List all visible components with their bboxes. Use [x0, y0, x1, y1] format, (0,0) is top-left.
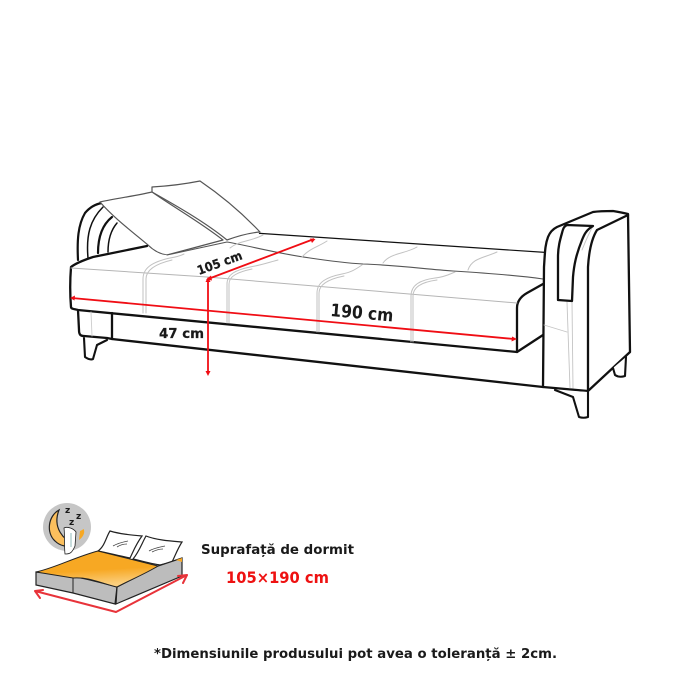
seat cushion: [70, 234, 545, 352]
arm strap: [558, 225, 593, 301]
back pillow: [152, 181, 260, 240]
icon: sleeping bed: [35, 503, 187, 612]
moon badge: z: [76, 512, 81, 522]
back rail: [260, 234, 545, 253]
right front leg: [555, 390, 588, 418]
front rail and base: [112, 313, 543, 387]
right armrest: [543, 211, 630, 391]
left leg: [84, 338, 107, 359]
pillows: [98, 531, 142, 558]
left armrest back: [78, 203, 117, 260]
right back leg: [613, 357, 626, 377]
sofa illustration: [70, 181, 630, 418]
value: sleeping surface size: 105×190 cm: [226, 568, 329, 587]
footnote: *Dimensiunile produsului pot avea o toleranță ± 2cm.: [154, 646, 557, 662]
label: 47 cm: 47 cm: [159, 326, 204, 342]
seat crease and front edge: [167, 242, 543, 279]
orange sheet: [36, 551, 158, 587]
moon badge: z: [65, 506, 70, 516]
label: 190 cm: 190 cm: [330, 301, 394, 326]
front pillow: [100, 192, 223, 255]
depth dimension arrow: [206, 238, 316, 280]
label: 105 cm: 105 cm: [195, 248, 244, 278]
seams: [143, 235, 497, 342]
width dimension arrow: [70, 296, 517, 342]
red arrow: [35, 575, 187, 612]
arm seams: [544, 226, 593, 388]
moon badge: [43, 503, 91, 554]
heading: sleeping surface: Suprafață de dormit: [201, 542, 355, 558]
height dimension arrow: [206, 277, 210, 376]
mattress sides: [36, 572, 117, 604]
moon badge: z: [69, 518, 74, 528]
